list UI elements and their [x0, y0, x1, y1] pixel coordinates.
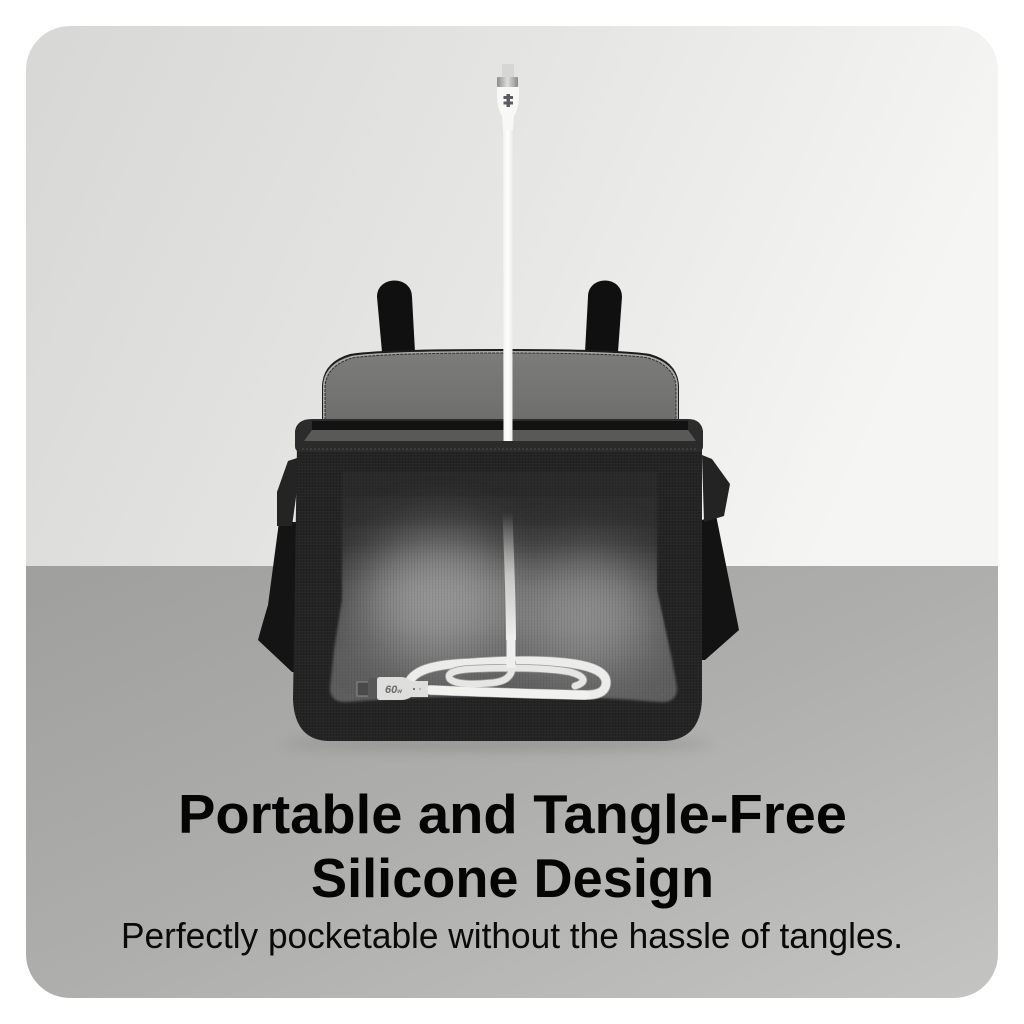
left bag strap	[258, 458, 297, 672]
label: 60w wattage mark: 60w	[385, 684, 402, 696]
illustration: messenger bag with cable	[258, 64, 739, 741]
right closure tab	[585, 280, 622, 352]
icon: brand logo	[504, 94, 513, 107]
coiled cable	[409, 512, 606, 695]
upper USB-C connector	[497, 64, 519, 130]
open bag flap	[322, 349, 679, 420]
heading: Portable and Tangle-Free	[178, 783, 847, 845]
heading: Silicone Design	[311, 847, 714, 909]
subheading: Perfectly pocketable without the hassle of tangles.	[121, 915, 903, 956]
see-through pocket window	[325, 470, 681, 705]
right bag strap	[700, 455, 739, 660]
left closure tab	[377, 280, 415, 352]
lower USB-C connector	[357, 677, 428, 700]
upper cable	[503, 125, 512, 441]
bag opening rim	[295, 419, 703, 452]
bag body	[293, 445, 702, 741]
